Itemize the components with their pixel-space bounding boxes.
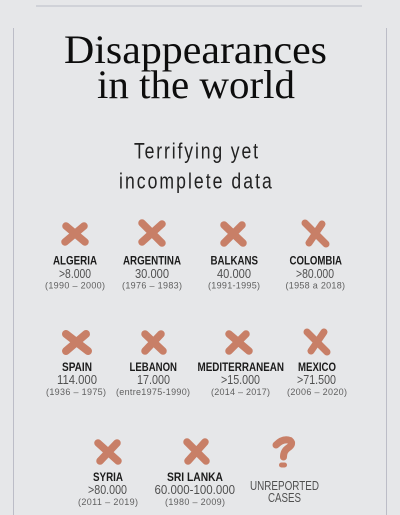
entry: Colombia: (1958 a 2018) <box>286 280 345 290</box>
entry: unreported cases: UNREPORTED <box>250 479 319 493</box>
entry: Sri Lanka: 60.000-100.000 <box>154 483 235 497</box>
entry: Spain: (1936 – 1975) <box>46 387 106 397</box>
entry: Mediterranean: >15.000 <box>221 373 260 387</box>
entry: unreported cases: CASES <box>268 491 301 505</box>
subtitle: Terrifying yet <box>134 140 258 164</box>
entry: Balkans: BALKANS <box>210 256 258 268</box>
entry: Lebanon <box>116 334 190 397</box>
entry: Syria <box>78 443 138 507</box>
entry: Syria: SYRIA <box>93 472 123 484</box>
entry: Lebanon: LEBANON <box>130 362 177 374</box>
entry: Algeria: >8.000 <box>59 267 91 281</box>
entry: Colombia: >80.000 <box>296 267 334 281</box>
title: Disappearances <box>64 27 327 72</box>
subtitle <box>119 140 273 194</box>
entry: Algeria <box>45 226 105 290</box>
entry: Mexico: MEXICO <box>298 362 336 374</box>
entry: Algeria: ALGERIA <box>53 256 97 268</box>
entry: Syria: >80.000 <box>88 483 127 497</box>
entry: Mexico: (2006 – 2020) <box>287 387 347 397</box>
entry: Mediterranean: (2014 – 2017) <box>211 387 270 397</box>
entry: Algeria: (1990 – 2000) <box>45 280 105 290</box>
entry: Mexico: >71.500 <box>297 373 336 387</box>
entry: Argentina: ARGENTINA <box>123 256 181 268</box>
entry: Lebanon: (entre1975-1990) <box>116 387 190 397</box>
entry: Mediterranean <box>198 334 284 397</box>
entry: Colombia: COLOMBIA <box>290 256 342 268</box>
entry: Sri Lanka: (1980 – 2009) <box>165 497 225 507</box>
entry: Balkans: 40.000 <box>217 267 251 281</box>
entry: Argentina <box>122 223 182 290</box>
entry: Sri Lanka: SRI LANKA <box>167 472 223 484</box>
entry: Argentina: 30.000 <box>135 267 169 281</box>
entry: Sri Lanka <box>154 442 235 507</box>
entry: Lebanon: 17.000 <box>137 373 170 387</box>
entry: Argentina: (1976 – 1983) <box>122 280 182 290</box>
entry: Colombia <box>286 223 345 290</box>
entry: Syria: (2011 – 2019) <box>78 497 138 507</box>
entry: Balkans <box>208 225 260 290</box>
entry: Spain <box>46 334 106 397</box>
title <box>64 27 327 107</box>
entry: Spain: 114.000 <box>57 373 97 387</box>
entry: Spain: SPAIN <box>62 362 92 374</box>
entry: unreported cases <box>250 440 319 505</box>
entry: Mediterranean: MEDITERRANEAN <box>198 362 284 374</box>
title: in the world <box>97 62 295 107</box>
entry: Balkans: (1991-1995) <box>208 280 260 290</box>
entry: Mexico <box>287 332 347 397</box>
subtitle: incomplete data <box>119 170 273 194</box>
